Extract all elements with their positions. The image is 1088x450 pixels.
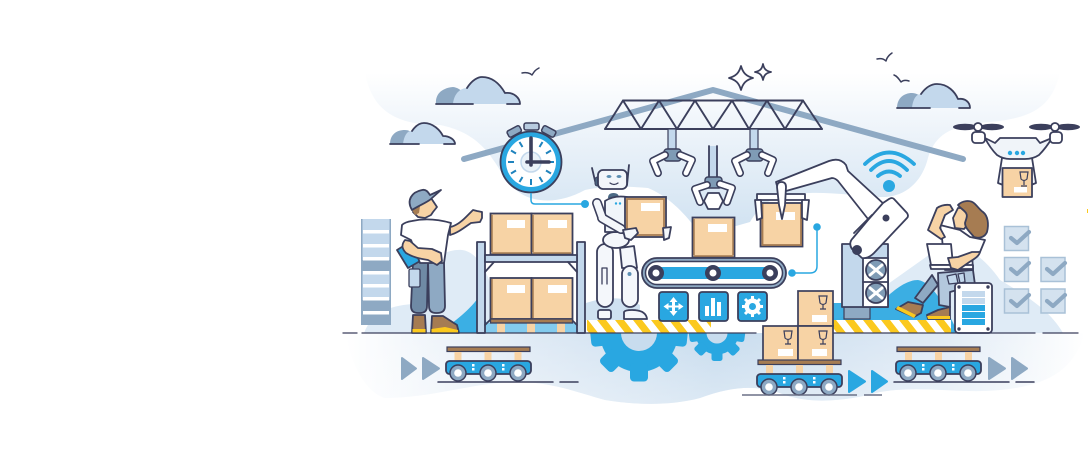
boots xyxy=(896,302,950,319)
robotic arm xyxy=(776,160,908,258)
stopwatch xyxy=(500,123,562,192)
ears xyxy=(595,177,600,186)
forearm xyxy=(948,252,980,270)
sparkle stars xyxy=(729,64,771,90)
worker man xyxy=(397,190,482,333)
eyes and smile xyxy=(606,175,622,184)
rotor hubs xyxy=(972,123,1062,143)
birds xyxy=(522,53,909,82)
small gear xyxy=(688,334,746,361)
lower boxes xyxy=(490,278,572,319)
upper boxes xyxy=(490,214,572,254)
shelf with boxes xyxy=(477,214,585,333)
legs xyxy=(597,244,647,319)
yellow hazard platform left xyxy=(587,320,711,333)
belt pockets xyxy=(947,273,965,284)
drone xyxy=(953,123,1080,197)
icon: bars tile xyxy=(699,292,728,321)
pallet plank xyxy=(490,319,572,323)
checklist boxes xyxy=(1004,226,1065,313)
arms holding parcel xyxy=(998,158,1036,185)
tablet xyxy=(397,240,427,268)
raised arm xyxy=(928,205,953,239)
pallet legs xyxy=(497,323,565,333)
gripper centre with hex grip xyxy=(695,146,732,209)
boot soles xyxy=(896,306,950,319)
pointing arm xyxy=(450,210,482,235)
laptop xyxy=(927,244,973,269)
head xyxy=(598,170,627,189)
connector conveyor to arm xyxy=(788,223,821,277)
boots xyxy=(412,315,459,333)
parcel xyxy=(1002,168,1032,197)
icon: settings tile xyxy=(738,292,767,321)
held box xyxy=(625,197,666,237)
worker woman xyxy=(896,201,988,319)
arrows: left pair xyxy=(402,358,439,379)
antennas xyxy=(592,165,629,185)
gripper left xyxy=(653,129,692,173)
ground line under left cart xyxy=(438,381,578,383)
cap xyxy=(410,190,441,210)
cart: lower centre xyxy=(757,360,842,395)
box held by arm xyxy=(755,182,809,246)
cart: left xyxy=(446,347,531,381)
shirt xyxy=(401,219,451,263)
joint block xyxy=(850,198,908,258)
stack of boxes on cart xyxy=(763,291,833,360)
background: hills right xyxy=(772,240,1063,333)
right leg xyxy=(428,262,445,313)
floor line xyxy=(343,332,1078,334)
arrows: right pair xyxy=(989,358,1027,379)
edge mark xyxy=(1087,209,1088,213)
pocket xyxy=(409,269,420,287)
face xyxy=(413,195,437,218)
front leg xyxy=(938,270,975,307)
icon: move arrows tile xyxy=(659,292,688,321)
storage rack ladder xyxy=(361,219,391,325)
body xyxy=(985,138,1052,159)
box on conveyor xyxy=(692,218,734,258)
robotic arm base xyxy=(842,244,888,319)
background: hills left xyxy=(364,250,640,333)
hazard platform right xyxy=(833,320,951,333)
icon: wifi xyxy=(865,152,914,192)
truss crane xyxy=(605,100,822,129)
warehouse automation illustration xyxy=(342,52,1088,404)
arrows: blue pair xyxy=(849,371,887,392)
upper arm and forearm xyxy=(776,160,886,219)
cloud lower left xyxy=(390,123,455,144)
shirt xyxy=(940,225,985,270)
left leg xyxy=(411,262,428,313)
hair xyxy=(958,201,988,238)
humanoid robot xyxy=(592,165,671,319)
boot soles xyxy=(412,327,458,332)
connector clock to robot xyxy=(531,193,589,208)
torso xyxy=(605,196,627,232)
propellers xyxy=(953,124,1080,130)
posts xyxy=(477,242,585,333)
arms xyxy=(597,203,621,229)
large gear xyxy=(590,334,688,382)
cloud right xyxy=(897,84,970,108)
face xyxy=(953,208,970,229)
cart: right xyxy=(896,347,981,381)
server box xyxy=(955,283,992,333)
gripper right xyxy=(735,129,773,173)
claw xyxy=(755,182,809,220)
fans xyxy=(866,260,886,303)
ground line under centre cart xyxy=(742,394,882,396)
crossing arm xyxy=(402,240,442,265)
back leg xyxy=(915,275,938,303)
ground line under right cart xyxy=(894,381,1034,383)
background: sky blob xyxy=(365,73,1060,226)
pelvis xyxy=(603,232,629,248)
cloud top left xyxy=(436,77,520,104)
conveyor belt xyxy=(642,258,786,288)
roof line xyxy=(464,90,963,159)
neck xyxy=(608,193,619,198)
background: floor blob xyxy=(345,333,1085,404)
